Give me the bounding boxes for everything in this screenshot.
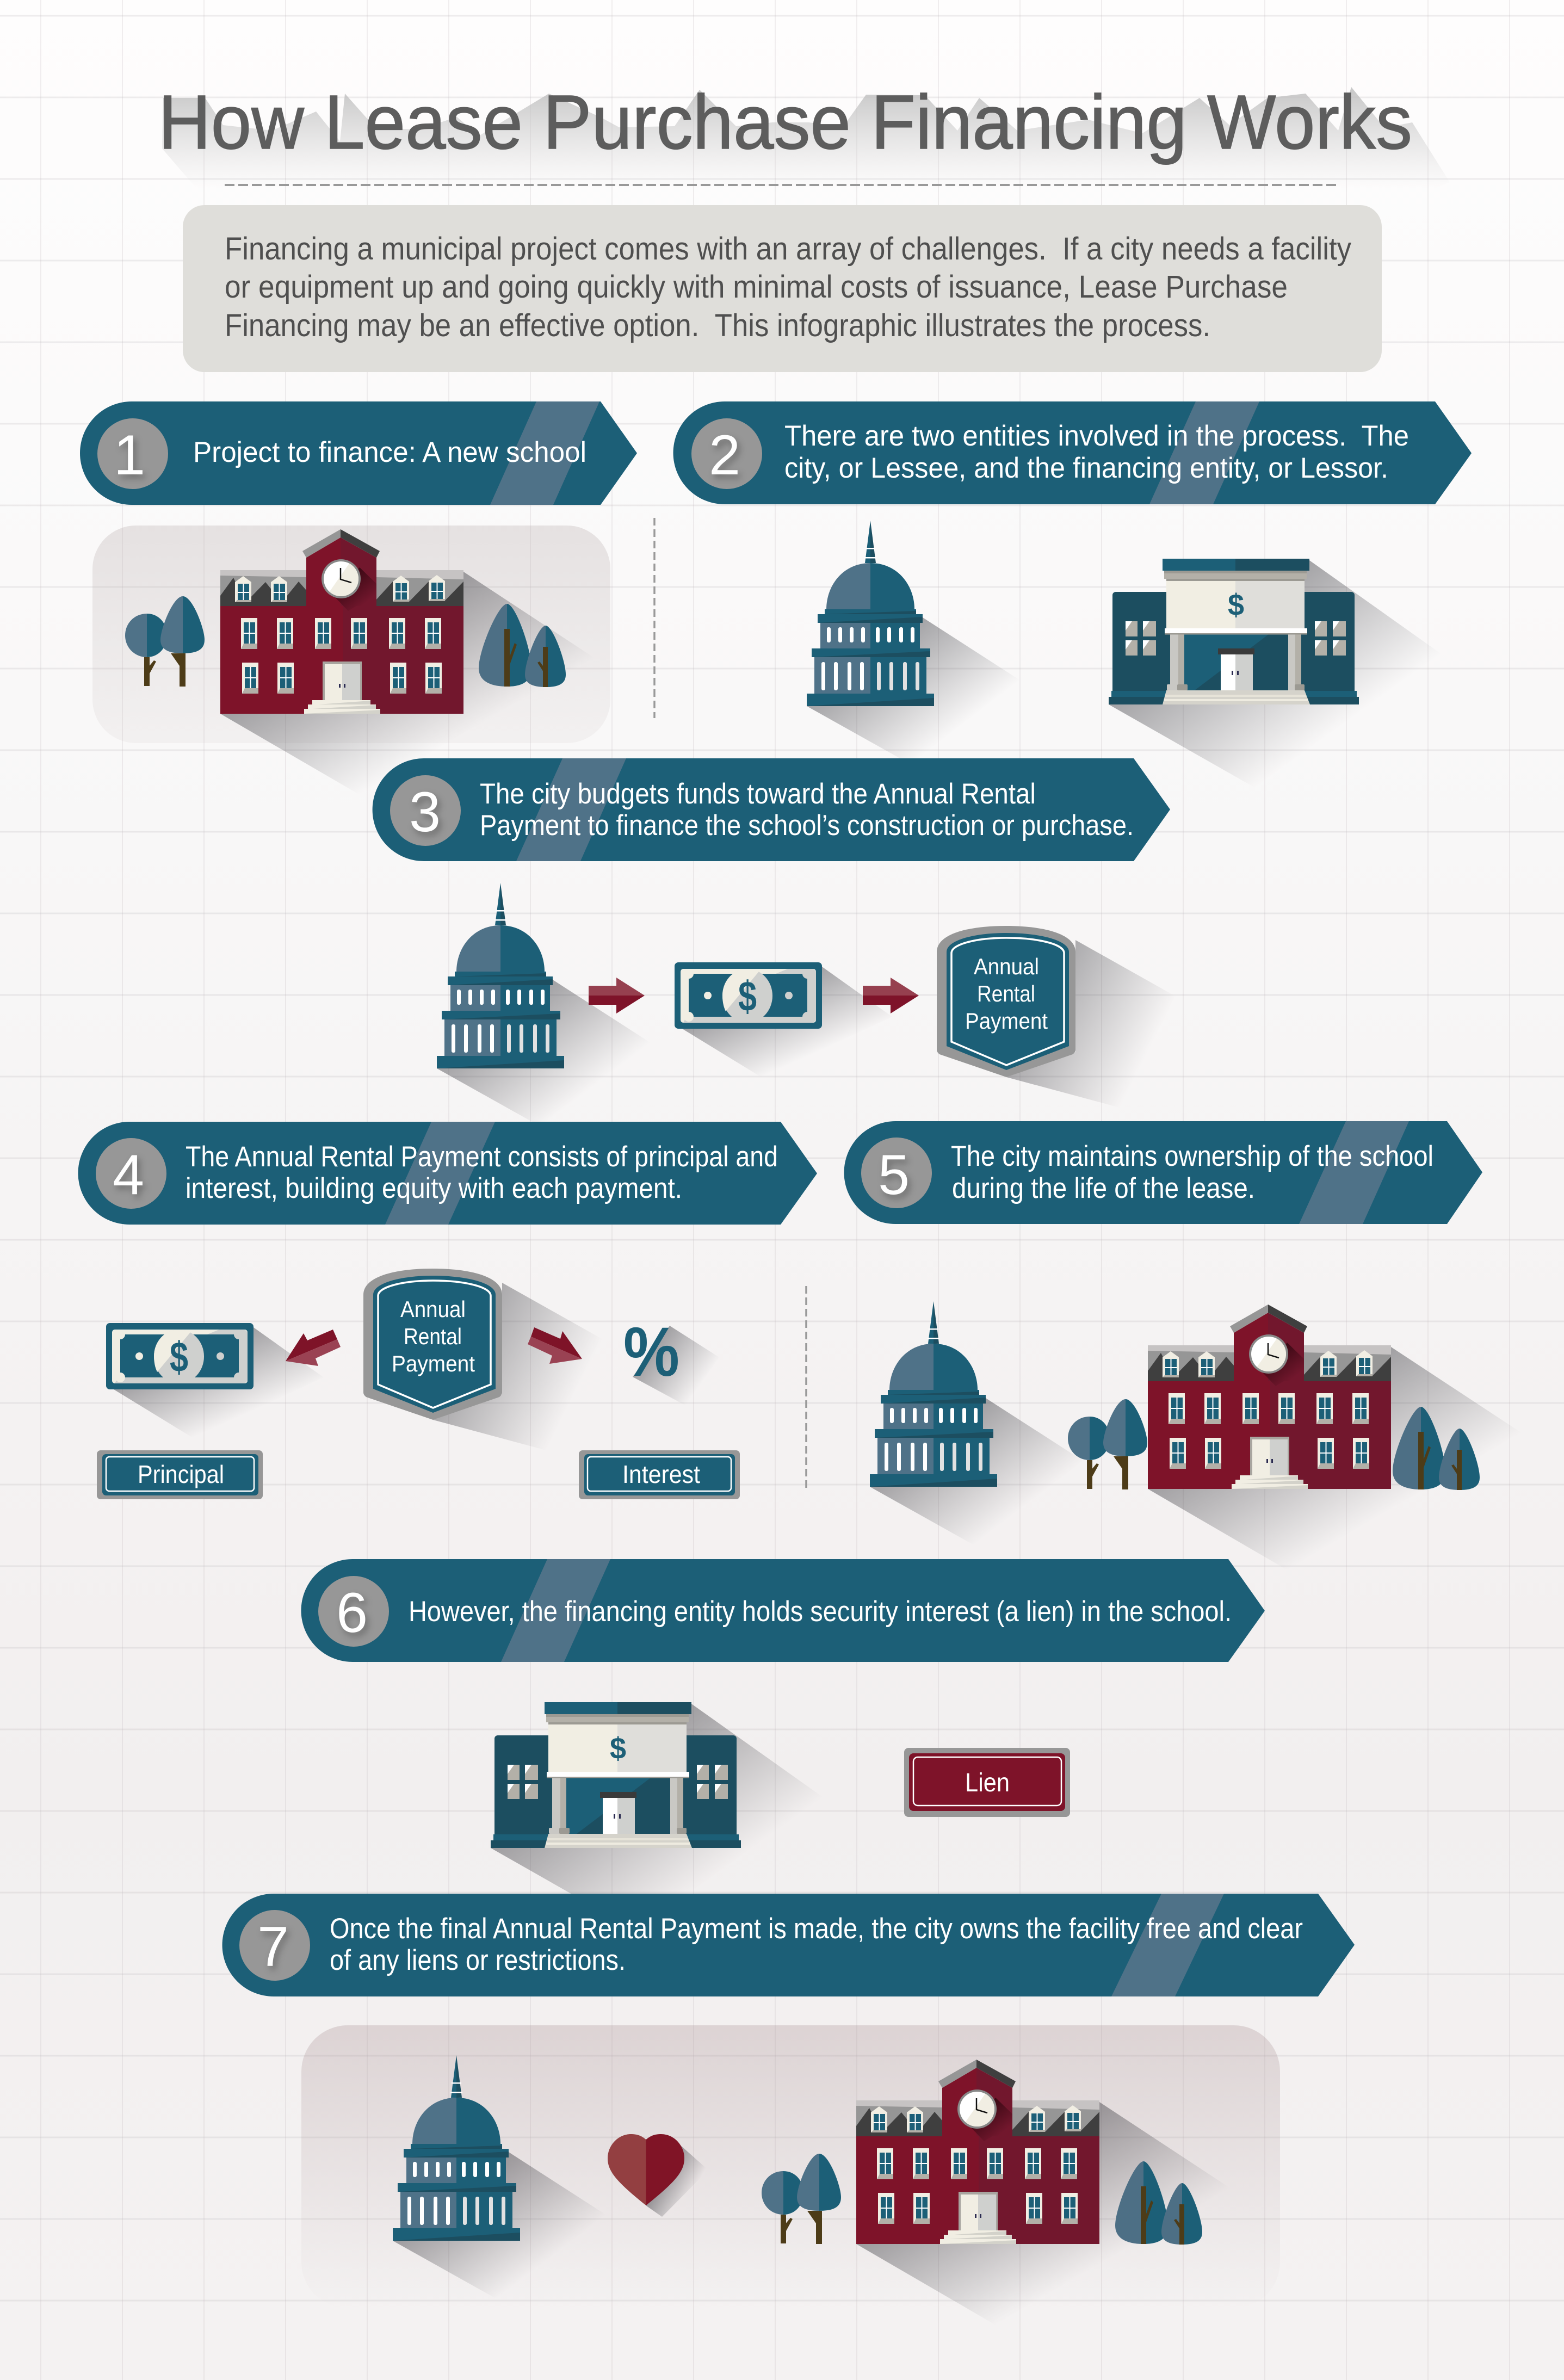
- step 2 banner: city, or Lessee, and the financing entity, or Lessor.: [784, 452, 1388, 484]
- step 2 banner: [673, 401, 1472, 504]
- icon: bank, lessor: $: [1228, 588, 1244, 622]
- badge: annual rental payment, step 4: Annual: [400, 1296, 466, 1322]
- step 4 text: The Annual Rental Payment consists of principal and: [186, 1141, 778, 1173]
- arrow: city to money: [589, 978, 645, 1013]
- badge: annual rental payment, step 3: [937, 926, 1176, 1108]
- step 4 banner: [78, 1122, 817, 1225]
- icon: trees right of school, step 1: [479, 604, 566, 687]
- step number 7: 7: [257, 1915, 289, 1979]
- icon: heart: [608, 2134, 708, 2217]
- badge: annual rental payment, step 4: Payment: [392, 1351, 475, 1376]
- label: principal: Principal: [138, 1460, 224, 1488]
- badge: annual rental payment, step 3: Annual: [974, 954, 1039, 979]
- icon: dollar bill, step 3: $: [738, 972, 757, 1020]
- label: lien: [904, 1748, 1070, 1817]
- icon: trees left of school, step 1: [125, 596, 205, 687]
- step 6 banner: [301, 1559, 1265, 1662]
- icon: bank, step 6: [491, 1702, 825, 1931]
- icon: percent: %: [623, 1313, 679, 1391]
- intro text: Financing a municipal project comes with an array of challenges. If a city needs a facility: [225, 231, 1351, 267]
- step 1 text: Project to finance: A new school: [193, 436, 586, 468]
- icon: school, step 5: [1148, 1305, 1522, 1571]
- badge: annual rental payment, step 4: Rental: [404, 1324, 462, 1349]
- badge: annual rental payment, step 3: Payment: [965, 1008, 1048, 1034]
- icon: dollar bill, principal: [106, 1323, 324, 1438]
- step 4 banner: interest, building equity with each payment.: [186, 1172, 682, 1204]
- icon: capitol, city lessee: [807, 521, 1021, 764]
- intro panel: or equipment up and going quickly with minimal costs of issuance, Lease Purchase: [225, 269, 1288, 305]
- icon: bank, step 6: $: [610, 1731, 626, 1765]
- step number 2: 2: [709, 424, 740, 487]
- icon: bank, lessor: [1109, 559, 1443, 788]
- icon: trees right of school, step 7: [1115, 2161, 1202, 2245]
- icon: percent: [623, 1313, 719, 1406]
- step number 6: 6: [336, 1581, 368, 1645]
- step number 4: 4: [113, 1143, 144, 1207]
- badge: annual rental payment, step 3: Rental: [977, 981, 1035, 1006]
- icon: trees left of school, step 7: [762, 2154, 841, 2244]
- label: interest: Interest: [622, 1460, 700, 1488]
- arrow: payment to interest: [528, 1327, 582, 1364]
- divider, step 1 and 2: [653, 518, 656, 718]
- arrow: money to payment: [863, 978, 919, 1013]
- icon: capitol, step 5: [870, 1301, 1084, 1545]
- step number 1: 1: [114, 424, 145, 487]
- intro panel: Financing may be an effective option. This infographic illustrates the process.: [225, 308, 1210, 343]
- step 3 text: The city budgets funds toward the Annual Rental: [480, 778, 1036, 810]
- arrow: payment to principal: [286, 1330, 341, 1366]
- icon: dollar bill, principal: $: [170, 1333, 188, 1381]
- step 7 text: Once the final Annual Rental Payment is made, the city owns the facility free and clear: [330, 1913, 1303, 1945]
- title: How Lease Purchase Financing Works: [158, 79, 1412, 165]
- step 1 banner: [80, 401, 637, 505]
- icon: trees left of school, step 5: [1068, 1399, 1147, 1489]
- icon: trees right of school, step 5: [1393, 1407, 1480, 1490]
- step 3 banner: Payment to finance the school’s construction or purchase.: [480, 809, 1134, 842]
- label: lien: Lien: [965, 1769, 1010, 1797]
- icon: capitol, step 3: [437, 883, 651, 1127]
- label: interest: [579, 1450, 740, 1499]
- icon: capitol, step 7: [393, 2055, 607, 2299]
- step 6 text: However, the financing entity holds security interest (a lien) in the school.: [409, 1596, 1232, 1628]
- panel: step 7 illustration background: [301, 2025, 1280, 2308]
- step 7 banner: [222, 1894, 1355, 1996]
- divider, step 4 and 5: [805, 1286, 807, 1488]
- step number 5: 5: [878, 1143, 910, 1207]
- panel: step 1 illustration background: [92, 526, 610, 743]
- intro panel: [183, 205, 1382, 372]
- step 5 banner: [844, 1121, 1482, 1224]
- icon: school, step 7: [856, 2060, 1230, 2326]
- step 5 text: The city maintains ownership of the school: [951, 1140, 1433, 1172]
- step number 3: 3: [409, 781, 441, 844]
- step 3 banner: [373, 758, 1170, 861]
- step 2 text: There are two entities involved in the process. The: [784, 420, 1409, 452]
- icon: school, step 1: [220, 529, 594, 795]
- title long shadow: [162, 87, 1450, 188]
- step 7 banner: of any liens or restrictions.: [330, 1944, 626, 1976]
- step 5 banner: during the life of the lease.: [952, 1172, 1255, 1204]
- badge: annual rental payment, step 4: [363, 1269, 603, 1450]
- icon: dollar bill, step 3: [675, 962, 892, 1078]
- label: principal: [97, 1450, 263, 1499]
